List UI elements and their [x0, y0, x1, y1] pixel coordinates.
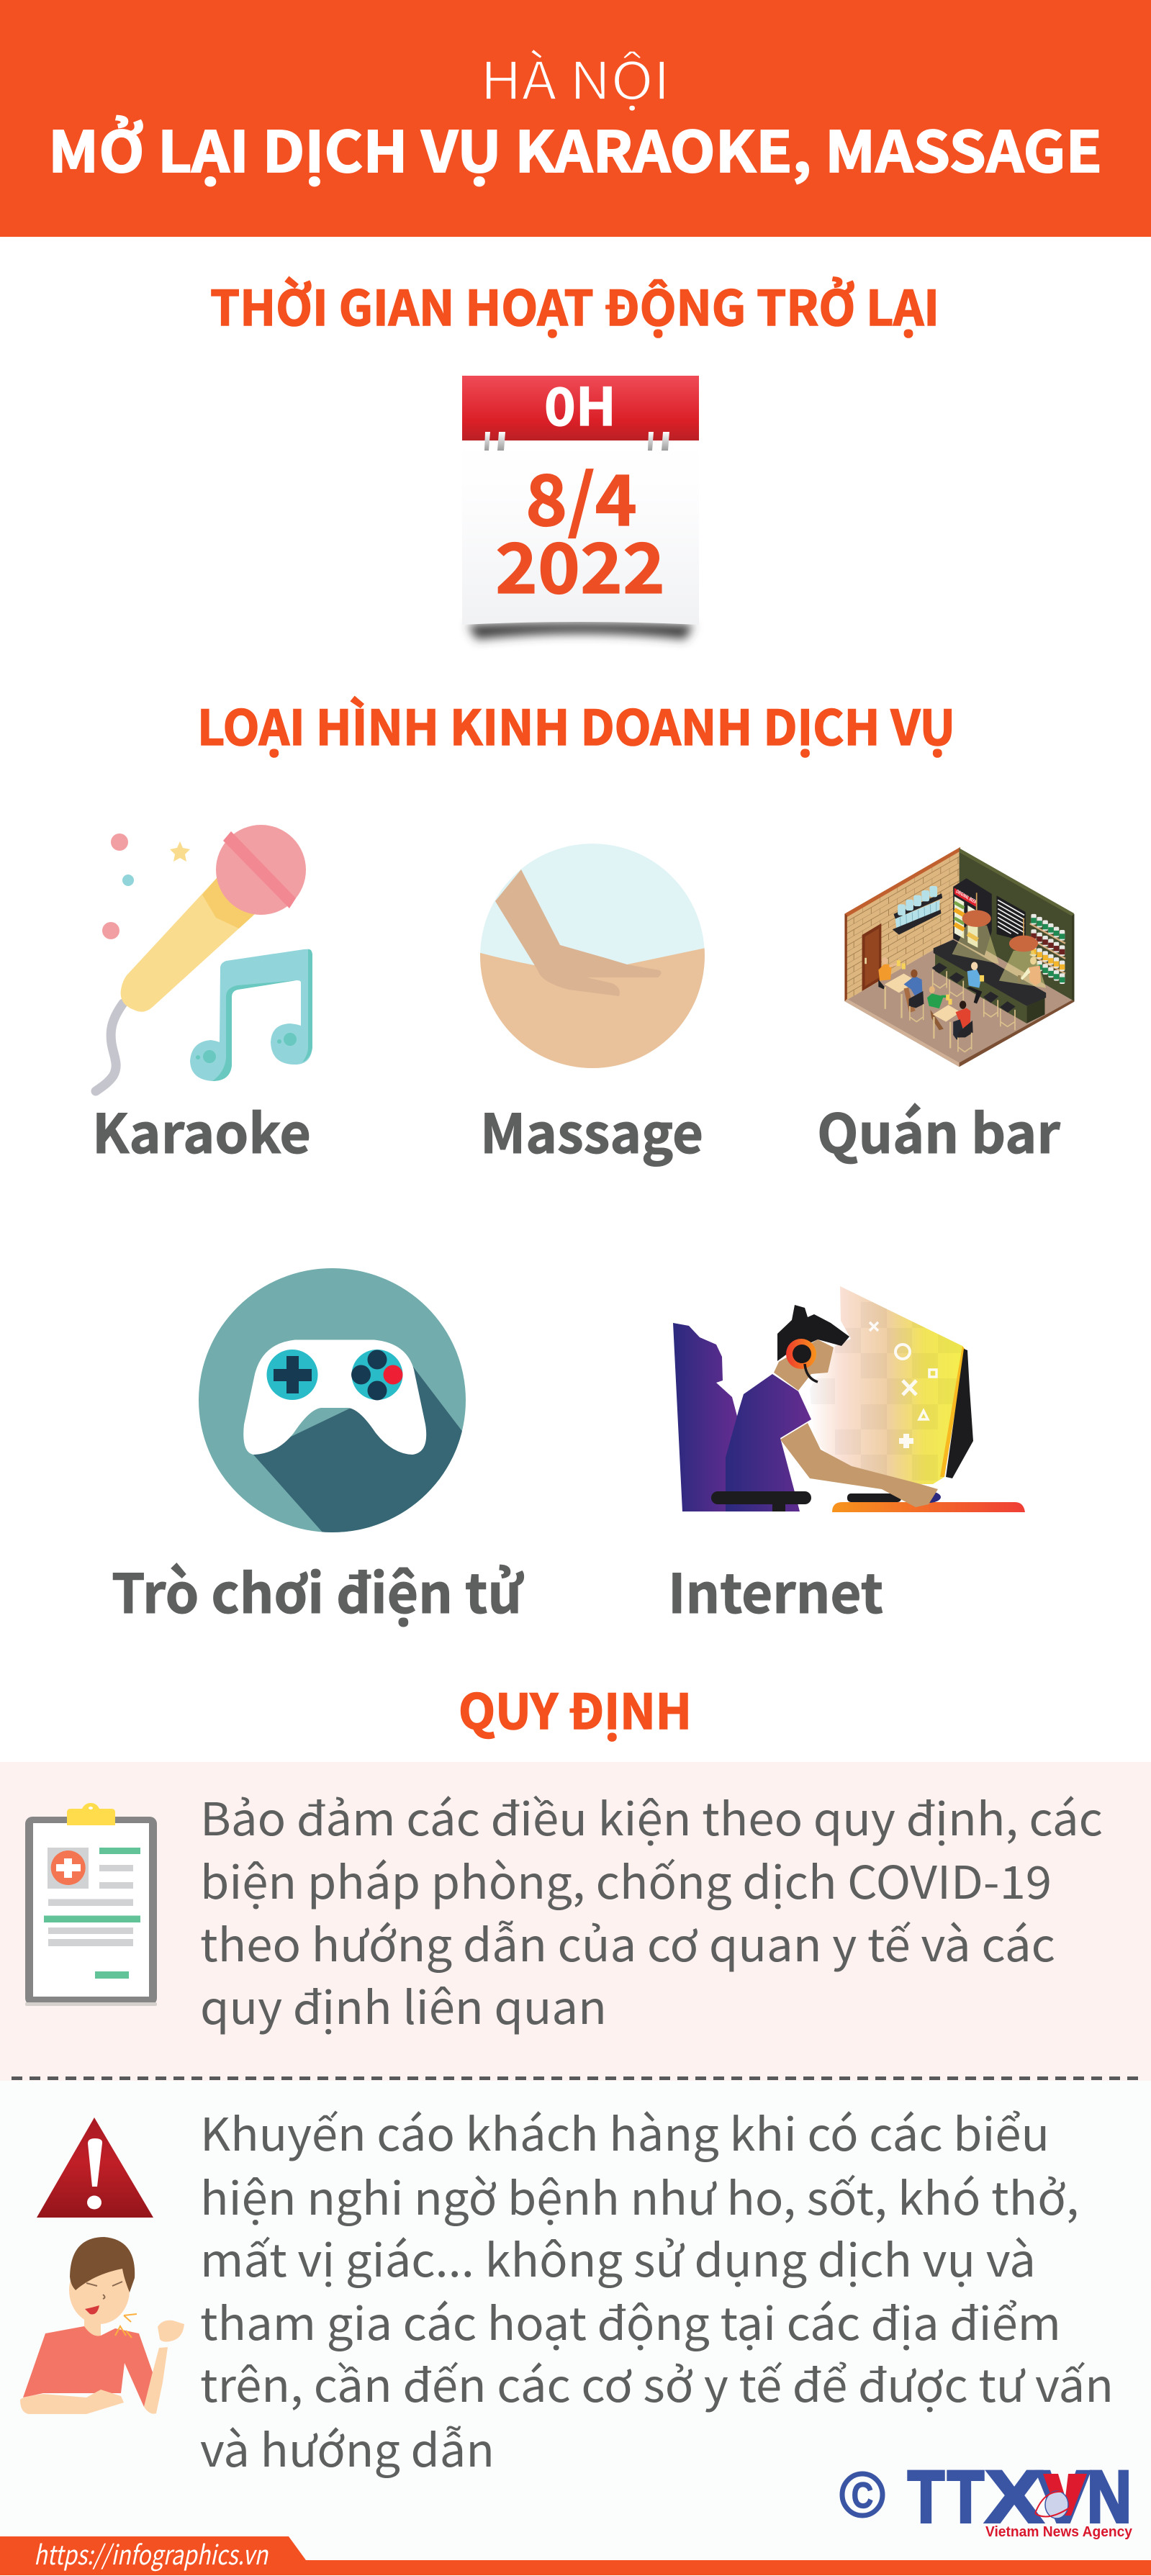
- heading: reopening time: THỜI GIAN HOẠT ĐỘNG TRỞ LẠI: [210, 270, 939, 340]
- icon: karaoke microphone and music note: [96, 825, 312, 1091]
- icon: isometric bar room: [844, 847, 1074, 1067]
- action buttons: [351, 1350, 403, 1401]
- regulation 1 text: quy định liên quan: [200, 1972, 607, 2038]
- regulation 2 text: mất vị giác... không sử dụng dịch vụ và: [200, 2225, 1036, 2290]
- icon: coughing person: [20, 2237, 184, 2414]
- footer bar: [0, 2534, 1151, 2575]
- time label: 0H: [544, 365, 616, 440]
- regulation 1 text: [200, 1784, 1103, 2038]
- regulation 1 text: Bảo đảm các điều kiện theo quy định, các: [200, 1784, 1103, 1849]
- controller body: [243, 1340, 426, 1455]
- globe: [1035, 2491, 1070, 2518]
- masseur arm and hand: [495, 869, 662, 996]
- music note: [190, 949, 312, 1081]
- calendar date card: [462, 365, 699, 639]
- gamer head and neck: [774, 1339, 834, 1391]
- bartender: [1018, 957, 1041, 986]
- bar stools: [932, 963, 1016, 1030]
- calendar shadow: [468, 623, 693, 639]
- green wall: [960, 848, 1074, 1001]
- source url: https://infographics.vn: [34, 2534, 268, 2572]
- label: massage: Massage: [480, 1090, 703, 1169]
- agency letters: V: [1037, 2456, 1090, 2538]
- regulation 2 text: Khuyến cáo khách hàng khi có các biểu: [200, 2099, 1050, 2164]
- header kicker: HÀ NỘI: [480, 39, 670, 114]
- heading: business types: LOẠI HÌNH KINH DOANH DỊCH VỤ: [197, 690, 955, 759]
- label: bar: Quán bar: [817, 1090, 1060, 1169]
- header band: [0, 0, 1151, 237]
- person fist: [158, 2320, 184, 2342]
- year: 2022: [495, 513, 665, 613]
- label: video games: Trò chơi điện tử: [112, 1550, 524, 1629]
- regulation 2 text: tham gia các hoạt động tại các địa điểm: [200, 2288, 1061, 2354]
- agency letters: X: [985, 2456, 1043, 2538]
- bar counter: [934, 940, 1046, 1023]
- door: [862, 923, 881, 991]
- directional pad: [266, 1350, 318, 1400]
- label: karaoke: Karaoke: [92, 1090, 311, 1169]
- icon: game controller: [199, 1268, 475, 1540]
- person torso: [23, 2326, 153, 2407]
- agency letters: N: [1087, 2456, 1132, 2538]
- copyright mark: [842, 2474, 883, 2516]
- calendar paper: [462, 440, 699, 625]
- microphone band: [223, 831, 296, 908]
- agency letters: T: [947, 2456, 984, 2538]
- long shadow: [253, 1367, 462, 1532]
- calendar red top: [462, 376, 699, 440]
- bottle racks: [1030, 914, 1065, 984]
- floor slab: [844, 935, 1074, 1067]
- left table with customers: [878, 957, 924, 1022]
- desk: [832, 1502, 1025, 1512]
- panel: regulation 1: [0, 1762, 1151, 2081]
- armrest: [711, 1491, 811, 1511]
- back skin: [475, 947, 709, 1072]
- agency letters: T: [908, 2456, 944, 2538]
- gamer hair: [777, 1305, 849, 1361]
- beer fridge: ORIGINAL BEER: [955, 888, 978, 905]
- microphone collar: [202, 878, 256, 928]
- monitor: [940, 1346, 973, 1478]
- label: internet: Internet: [668, 1550, 883, 1629]
- person hair: [70, 2237, 135, 2292]
- regulation 1 text: theo hướng dẫn của cơ quan y tế và các: [200, 1910, 1055, 1975]
- light cones and lamps: [952, 892, 1046, 988]
- main title: MỞ LẠI DỊCH VỤ KARAOKE, MASSAGE: [48, 108, 1102, 189]
- confetti dots and star: [102, 833, 190, 939]
- gamer body: [726, 1374, 811, 1511]
- glowing screen: [810, 1286, 964, 1484]
- heading: regulations: QUY ĐỊNH: [459, 1673, 692, 1743]
- microphone head: [216, 825, 306, 915]
- right table with customers: [927, 986, 973, 1052]
- regulation 2 text: trên, cần đến các cơ sở y tế để được tư vấn: [200, 2350, 1114, 2415]
- beer fridge: [953, 878, 992, 955]
- screen symbols: [870, 1322, 936, 1448]
- red V mark: [1043, 2474, 1087, 2516]
- microphone handle: [121, 878, 256, 1012]
- brick wall: [844, 848, 960, 1001]
- seated customer at bar: [967, 962, 984, 1003]
- icon: medical clipboard: [25, 1803, 157, 2006]
- game circle: [199, 1268, 466, 1532]
- icon: internet gamer at monitor: [673, 1286, 1025, 1512]
- person arms: [20, 2347, 168, 2414]
- keyboard and mouse: [847, 1491, 941, 1503]
- agency letters: [908, 2456, 1132, 2538]
- massage background circle: [480, 844, 704, 965]
- icon: warning triangle: [37, 2118, 153, 2218]
- person neck and face: [84, 2316, 101, 2336]
- wall shelves with glasses: [893, 886, 942, 935]
- copyright mark: C: [852, 2475, 873, 2516]
- regulation 2 text: và hướng dẫn: [200, 2415, 495, 2480]
- gamer arm: [780, 1423, 938, 1507]
- person facial features: [86, 2282, 122, 2299]
- agency name: Vietnam News Agency: [985, 2524, 1133, 2540]
- headset: [786, 1339, 818, 1382]
- regulation 2 text: hiện nghi ngờ bệnh như ho, sốt, khó thở,: [200, 2163, 1079, 2228]
- regulation 2 text: [200, 2099, 1114, 2480]
- logo: TTXVN copyright: [842, 2456, 1133, 2540]
- regulation 1 text: biện pháp phòng, chống dịch COVID-19: [200, 1847, 1052, 1912]
- gaming chair: [673, 1323, 739, 1511]
- menu board: [996, 895, 1026, 941]
- date: 8/4: [525, 444, 637, 546]
- pain marks: [115, 2314, 137, 2338]
- microphone cable: [96, 1003, 123, 1091]
- icon: massage: [475, 844, 709, 1072]
- calendar rings: [484, 432, 669, 451]
- panel: regulation 2: [0, 2081, 1151, 2576]
